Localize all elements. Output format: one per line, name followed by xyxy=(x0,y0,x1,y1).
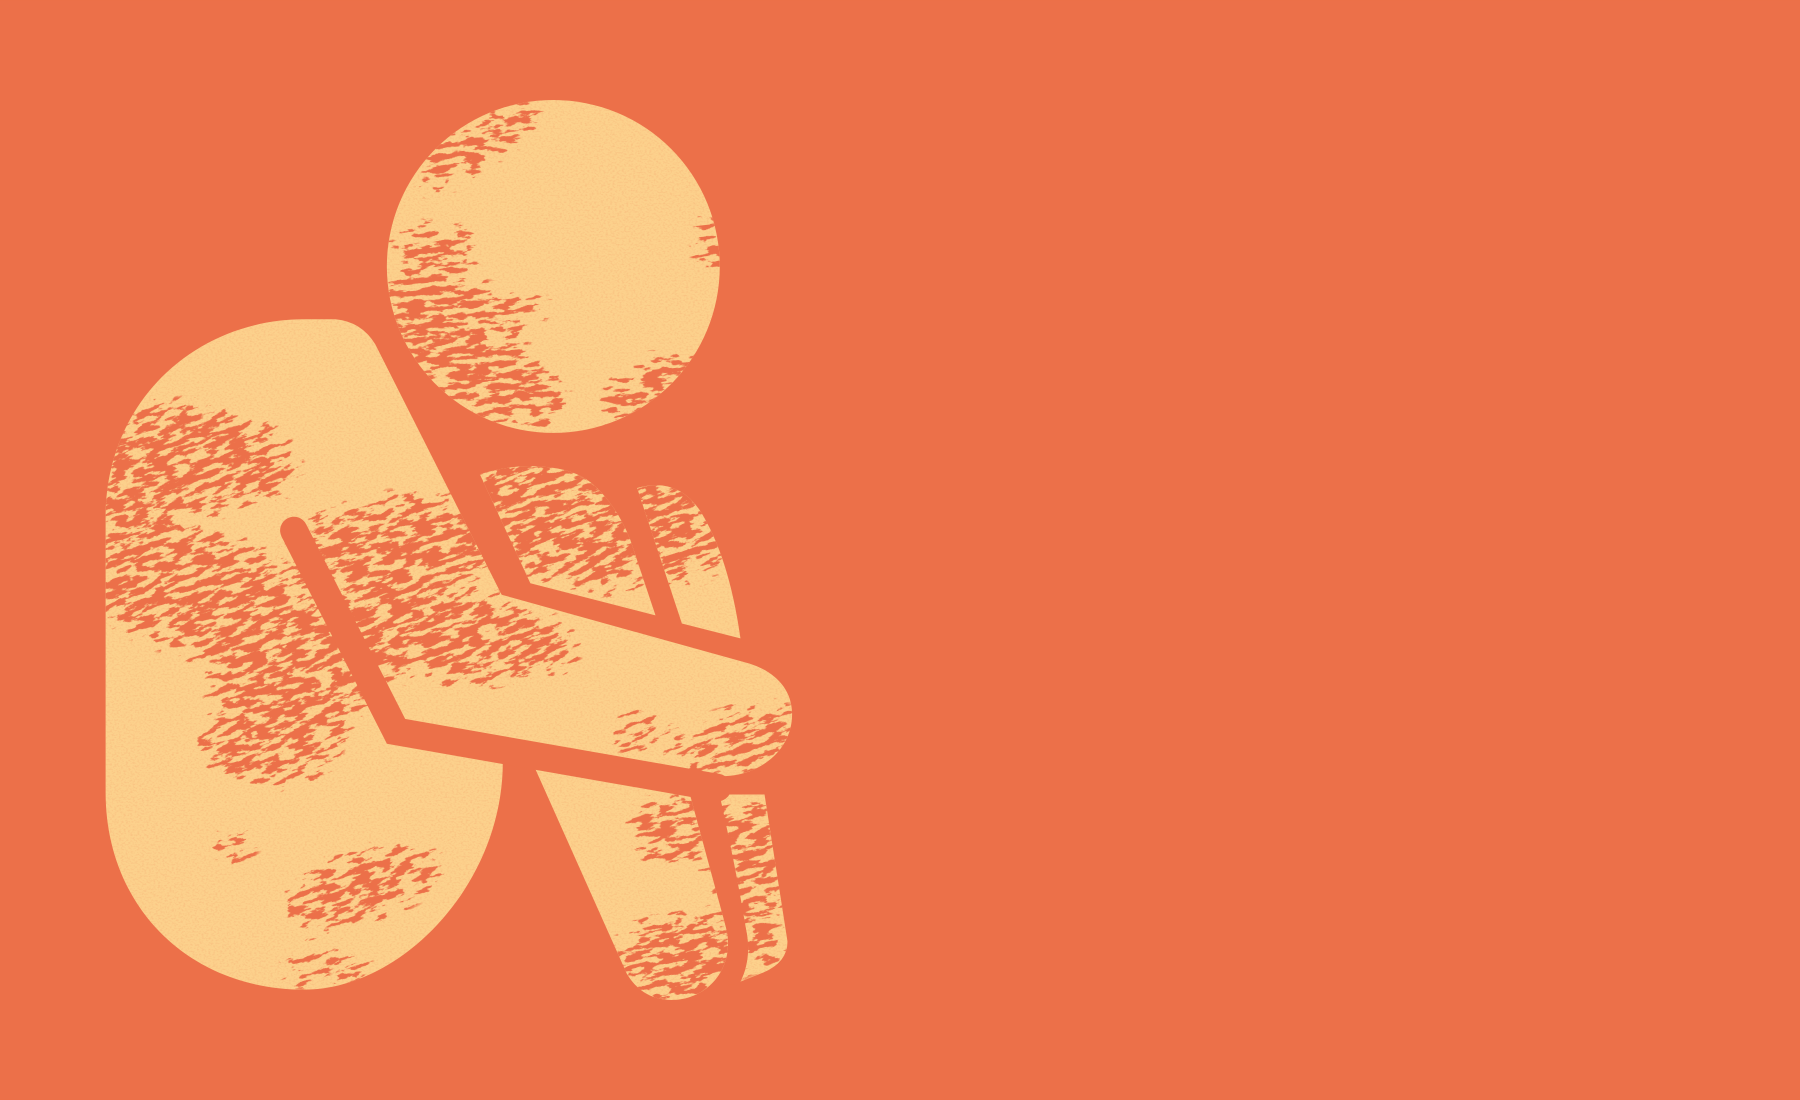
distress: thighs xyxy=(456,466,722,598)
worn distress texture xyxy=(106,102,792,1000)
distress: mid torso xyxy=(106,517,584,792)
leg separator gap xyxy=(696,785,748,985)
distress: head xyxy=(388,102,720,428)
paper grain texture xyxy=(106,100,792,1000)
torso and arm xyxy=(106,319,792,990)
far shin xyxy=(713,795,788,982)
distress: forearm tip xyxy=(608,698,792,774)
figure xyxy=(106,100,792,1000)
head xyxy=(387,100,720,433)
far thigh xyxy=(637,485,740,638)
near shin xyxy=(535,768,728,1000)
distress: upper torso xyxy=(106,395,514,608)
arm outline gap xyxy=(294,530,717,788)
distress: lower torso xyxy=(212,828,444,990)
distress: shins xyxy=(614,794,786,1000)
illustration: textured seated figure on orange background xyxy=(106,100,792,1000)
near thigh xyxy=(480,466,655,615)
